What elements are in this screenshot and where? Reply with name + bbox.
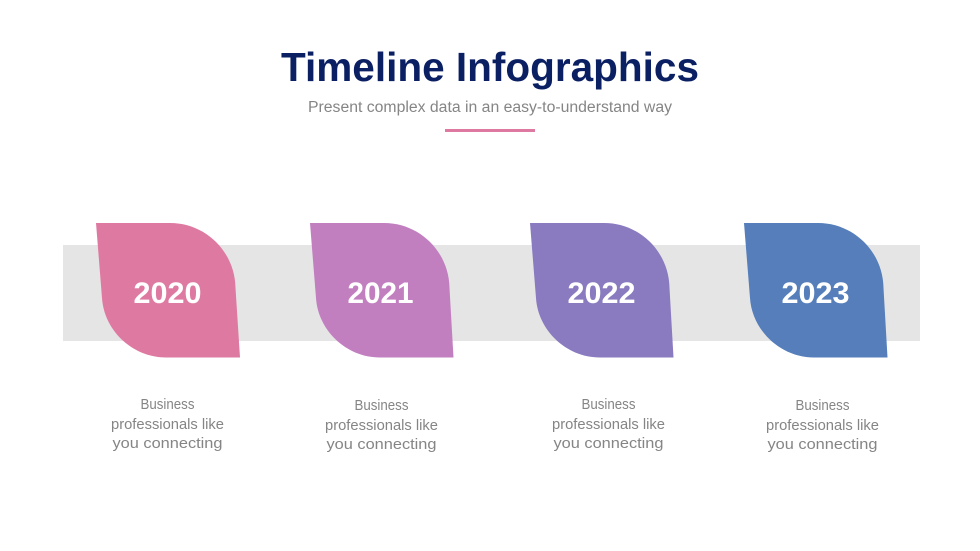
- milestone 2021: [310, 223, 454, 453]
- description 2021: professionals like: [325, 418, 438, 434]
- year 2020: 2020: [134, 277, 202, 310]
- accent underline: [445, 129, 535, 132]
- subtitle: Present complex data in an easy-to-understand way: [308, 99, 672, 116]
- year 2021: 2021: [348, 277, 414, 310]
- milestone 2022: [530, 223, 674, 452]
- description 2020: professionals like: [111, 417, 224, 433]
- leaf shape 2022: [530, 223, 674, 358]
- leaf shape 2020: [96, 223, 240, 358]
- description 2023: professionals like: [766, 418, 879, 434]
- year 2022: 2022: [568, 277, 636, 310]
- description 2020: you connecting: [112, 436, 222, 452]
- description 2023: Business: [796, 398, 850, 414]
- description 2023: you connecting: [768, 437, 878, 453]
- milestone 2023: [744, 223, 888, 453]
- description 2022: Business: [582, 397, 636, 413]
- description 2020: Business: [140, 397, 194, 413]
- description 2021: Business: [354, 398, 408, 414]
- description 2022: professionals like: [552, 417, 665, 433]
- timeline band: [63, 245, 920, 341]
- description 2022: you connecting: [554, 436, 664, 452]
- year 2023: 2023: [782, 277, 850, 310]
- description 2021: you connecting: [326, 437, 436, 453]
- leaf shape 2021: [310, 223, 454, 358]
- milestone 2020: [96, 223, 240, 452]
- title: Timeline Infographics: [281, 44, 699, 90]
- leaf shape 2023: [744, 223, 888, 358]
